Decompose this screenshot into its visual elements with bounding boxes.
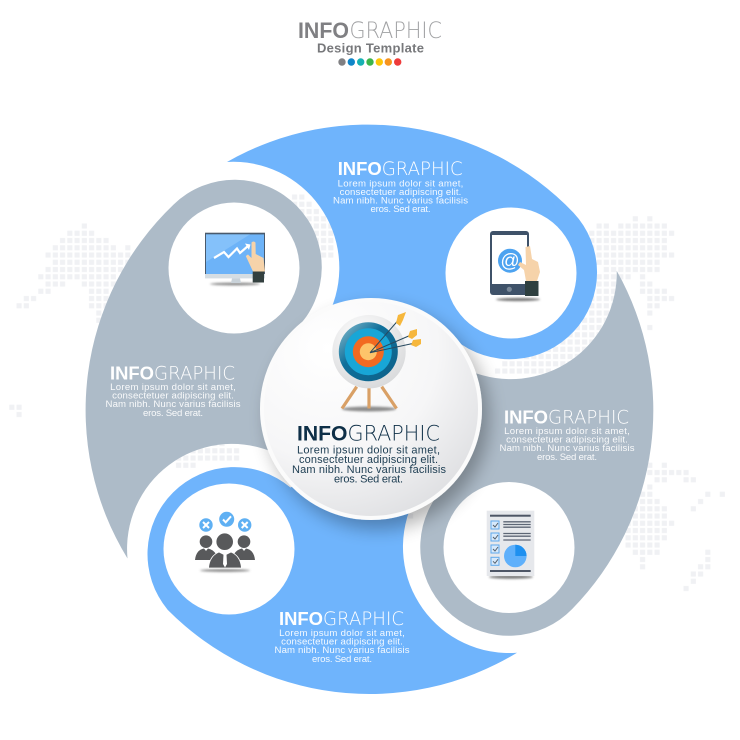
body text: eros. Sed erat.	[312, 654, 372, 665]
icon: monitor with rising chart and hand	[205, 233, 265, 285]
title wordmark: GRAPHIC	[350, 19, 442, 44]
heading	[110, 362, 235, 384]
heading: GRAPHIC	[382, 159, 463, 180]
centre heading: GRAPHIC	[348, 422, 440, 446]
body text: Lorem ipsum dolor sit amet,	[338, 178, 463, 190]
heading: INFO	[279, 608, 323, 629]
heading	[504, 406, 629, 428]
body text: Nam nibh. Nunc varius facilisis	[500, 443, 635, 454]
body text: consectetuer adipiscing elit.	[281, 637, 403, 648]
heading: INFO	[110, 362, 154, 384]
panel: bottom left blue	[147, 450, 517, 694]
centre body text: Nam nibh. Nunc varius facilisis	[292, 464, 446, 476]
body text	[500, 426, 635, 463]
title	[298, 18, 442, 66]
body text: eros. Sed erat.	[143, 408, 203, 419]
heading: GRAPHIC	[154, 364, 235, 384]
body text: Lorem ipsum dolor sit amet,	[504, 426, 630, 437]
heading	[279, 608, 404, 630]
heading: GRAPHIC	[548, 407, 629, 428]
body text: eros. Sed erat.	[370, 204, 430, 215]
centre disc background	[262, 300, 480, 518]
white icon circle	[164, 484, 294, 614]
icon: tablet with email and hand: @	[500, 251, 520, 272]
centre body text: Lorem ipsum dolor sit amet,	[297, 444, 440, 456]
body text: Nam nibh. Nunc varius facilisis	[274, 645, 410, 656]
centre body text	[292, 444, 446, 486]
body text	[106, 382, 241, 419]
title wordmark: INFO	[298, 18, 349, 43]
blue swoosh shape	[227, 125, 597, 359]
body text: consectetuer adipiscing elit.	[340, 187, 461, 198]
body text	[274, 628, 410, 665]
white icon circle	[446, 208, 576, 338]
subtitle: Design Template	[317, 40, 424, 56]
heading: INFO	[504, 406, 548, 427]
centre heading: INFO	[297, 423, 348, 446]
body text: Nam nibh. Nunc varius facilisis	[106, 399, 241, 410]
grey swoosh shape	[400, 271, 653, 636]
centre body text: consectetuer adipiscing elit.	[299, 454, 438, 466]
background dotted world map	[8, 193, 726, 592]
panel: left grey	[86, 180, 330, 559]
icon: tablet with email and hand	[490, 231, 540, 301]
body text: consectetuer adipiscing elit.	[506, 435, 628, 446]
icon: team with approval badges	[195, 512, 255, 572]
panel: centre disc	[262, 300, 480, 518]
icon: checklist document with pie chart	[487, 511, 534, 579]
body text: Nam nibh. Nunc varius facilisis	[333, 196, 468, 207]
body text: Lorem ipsum dolor sit amet,	[110, 382, 236, 393]
blue swoosh shape	[147, 450, 517, 694]
body text: consectetuer adipiscing elit.	[112, 391, 234, 402]
panel: right grey	[400, 271, 653, 636]
colour dots	[338, 58, 401, 66]
centre body text: eros. Sed erat.	[334, 474, 403, 486]
heading: INFO	[338, 158, 382, 179]
heading: GRAPHIC	[323, 609, 404, 630]
icon: archery target with arrows	[332, 312, 421, 412]
grey swoosh shape	[86, 180, 330, 559]
white icon circle	[168, 202, 300, 334]
centre heading	[297, 422, 440, 446]
panel: top right blue	[227, 125, 597, 359]
body text: eros. Sed erat.	[537, 452, 597, 463]
heading	[338, 158, 463, 180]
title wordmark	[298, 18, 442, 44]
white icon circle	[444, 482, 574, 613]
body text	[333, 178, 468, 215]
body text: Lorem ipsum dolor sit amet,	[279, 628, 405, 639]
